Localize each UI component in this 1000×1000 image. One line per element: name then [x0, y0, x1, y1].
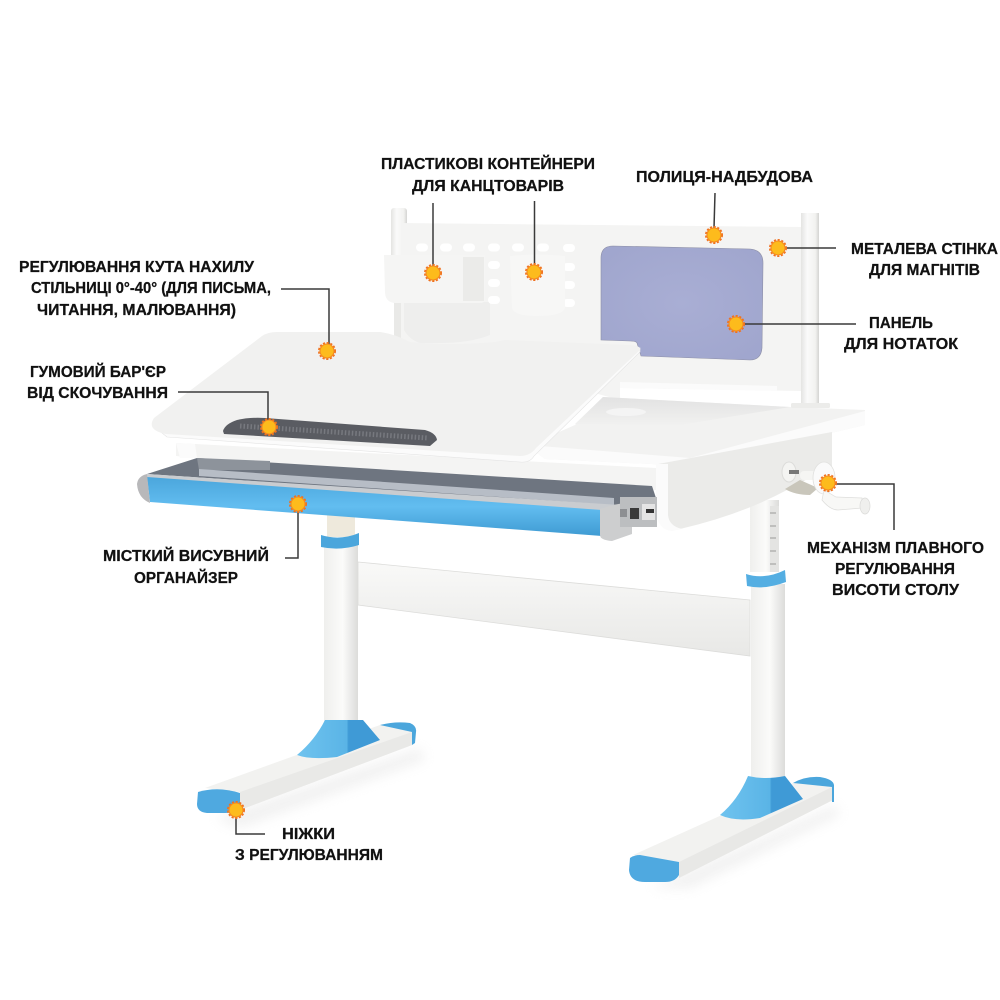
under-top frame: [176, 443, 656, 490]
drawer rail: [199, 469, 614, 505]
marker: height crank: [820, 475, 836, 491]
leader lines: [178, 193, 894, 834]
holes: [416, 244, 575, 307]
crank handle mechanism: [782, 462, 870, 514]
metal post right: [791, 213, 830, 408]
label: height mechanism: РЕГУЛЮВАННЯ: [835, 561, 955, 578]
label: metal wall: ДЛЯ МАГНІТІВ: [869, 262, 980, 279]
drawer slide hardware: [620, 497, 657, 527]
left foot: [197, 720, 416, 813]
label: height mechanism: [807, 540, 984, 599]
label: tilt adjustment: ЧИТАННЯ, МАЛЮВАННЯ): [37, 302, 236, 319]
right foot blue base: [720, 776, 803, 819]
label: drawer: ОРГАНАЙЗЕР: [134, 569, 238, 587]
left leg: [321, 515, 359, 727]
drawer tray interior: [147, 458, 656, 506]
felt notes panel: [601, 246, 763, 360]
label: feet: [235, 826, 383, 864]
label: metal wall: МЕТАЛЕВА СТІНКА: [851, 241, 998, 258]
label: height mechanism: ВИСОТИ СТОЛУ: [832, 582, 959, 599]
right leg: [746, 500, 786, 778]
drawer organiser: [137, 458, 657, 541]
tilting tabletop: [152, 332, 640, 462]
marker: plastic container round: [526, 264, 542, 280]
marker: tilt adjustment: [319, 343, 335, 359]
label: feet: НІЖКИ: [282, 826, 335, 843]
label: rubber barrier: ВІД СКОЧУВАННЯ: [27, 385, 168, 402]
right foot: [629, 776, 834, 882]
left foot rear cap: [380, 722, 416, 745]
label: tilt adjustment: РЕГУЛЮВАННЯ КУТА НАХИЛУ: [19, 259, 254, 276]
rubber anti-roll barrier: [223, 418, 437, 446]
left foot blue base: [297, 720, 380, 758]
label: plastic containers: ПЛАСТИКОВІ КОНТЕЙНЕРИ: [381, 155, 595, 173]
label: shelf: ПОЛИЦЯ-НАДБУДОВА: [636, 169, 813, 186]
label: notes panel: [844, 315, 959, 353]
label: metal wall: [851, 241, 998, 279]
product: height-adjustable desk: [137, 208, 870, 888]
label: plastic containers: [381, 155, 595, 195]
label: plastic containers: ДЛЯ КАНЦТОВАРІВ: [412, 178, 564, 195]
label: notes panel: ПАНЕЛЬ: [869, 315, 933, 332]
label: height mechanism: МЕХАНІЗМ ПЛАВНОГО: [807, 540, 984, 557]
marker: feet: [228, 802, 244, 818]
label: feet: З РЕГУЛЮВАННЯМ: [235, 847, 383, 864]
drawer blue front: [147, 477, 602, 536]
left leg blue band: [321, 533, 359, 549]
drawer right cap: [600, 502, 632, 541]
label: drawer: МІСТКИЙ ВИСУВНИЙ: [103, 547, 269, 565]
marker: drawer: [290, 496, 306, 512]
left foot front cap: [197, 789, 240, 813]
right foot rear cap: [793, 777, 834, 802]
floor shadows: [215, 748, 840, 888]
plastic container wide: [384, 255, 485, 303]
label: drawer: [103, 547, 269, 587]
label: rubber barrier: ГУМОВИЙ БАР'ЄР: [30, 363, 166, 381]
right leg blue band: [746, 570, 786, 587]
back panel with hole pattern: [384, 208, 802, 400]
label: notes panel: ДЛЯ НОТАТОК: [844, 336, 959, 353]
crossbar: [358, 562, 750, 656]
drawer left cap: [137, 474, 150, 503]
label: tilt adjustment: [19, 259, 271, 319]
marker: shelf: [706, 227, 722, 243]
marker: rubber barrier: [261, 419, 277, 435]
shelf strip: [620, 382, 777, 391]
side apron: [658, 432, 832, 529]
right foot front cap: [629, 855, 679, 882]
marker: plastic container wide: [425, 265, 441, 281]
right tabletop: [533, 397, 865, 466]
marker: notes panel: [728, 316, 744, 332]
marker: metal wall: [770, 240, 786, 256]
plastic container round: [510, 254, 565, 316]
label: tilt adjustment: СТІЛЬНИЦІ 0°-40° (ДЛЯ ПИСЬМА,: [31, 280, 271, 297]
label: rubber barrier: [27, 363, 168, 402]
